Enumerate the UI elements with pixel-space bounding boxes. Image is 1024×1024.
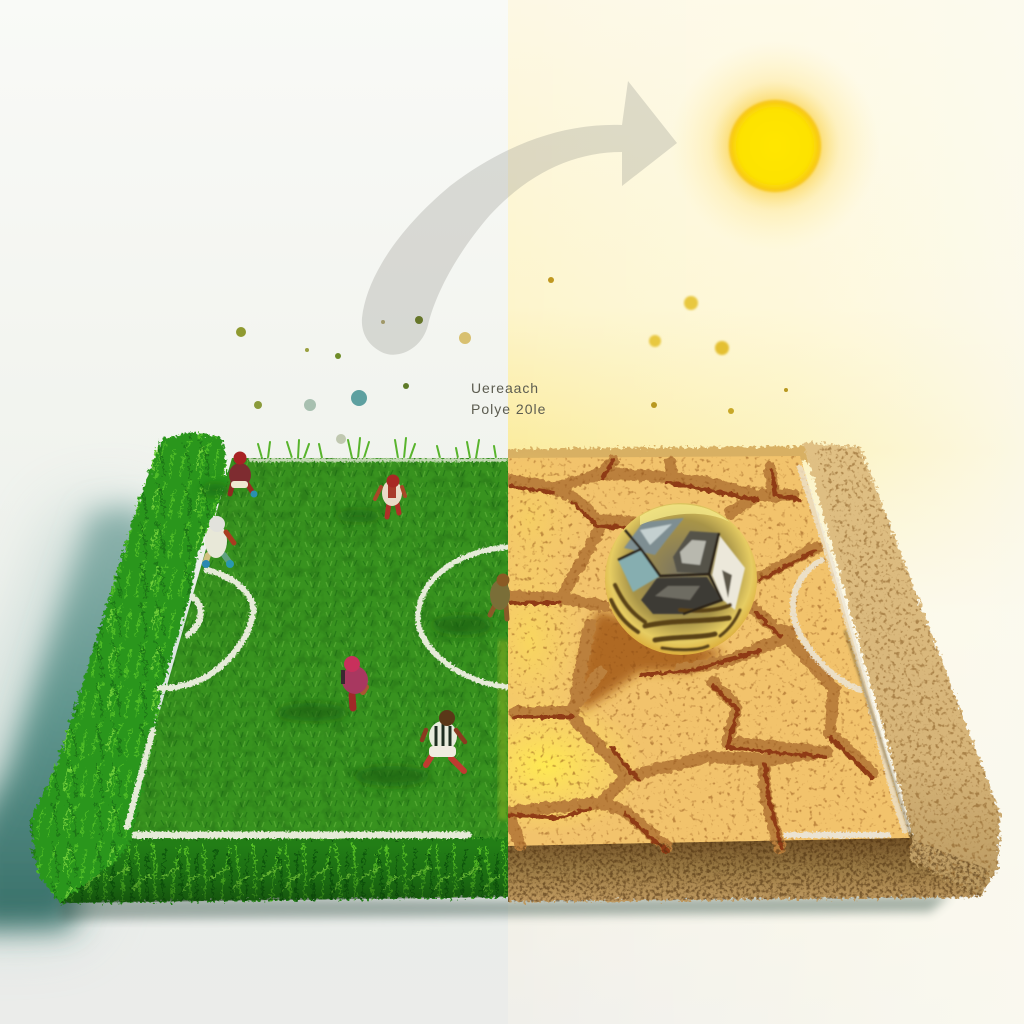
row of grass tufts behind the top line	[258, 438, 496, 458]
top blue-silver panel	[624, 518, 684, 555]
golden metallic football	[605, 503, 757, 655]
sun	[670, 41, 880, 251]
sandy border grain	[812, 442, 1000, 897]
caption text	[471, 380, 546, 417]
player 1: red kit	[229, 452, 258, 498]
background: warm right half	[508, 0, 1024, 1024]
right white-silver panel	[712, 536, 745, 610]
sandy right border	[803, 442, 1000, 897]
soil grain texture	[505, 456, 910, 846]
sunlit yellow glow across plates	[508, 502, 622, 820]
caption text: Uereaach	[471, 380, 539, 396]
left blue-silver panel	[618, 549, 660, 592]
ground shadow under the pitch	[0, 500, 950, 940]
player 5: pink kit	[342, 656, 368, 708]
ball contact shadow on soil	[580, 610, 725, 712]
grass left bank	[30, 432, 228, 903]
caption text: Polye 20le	[471, 401, 546, 417]
rough top lip of the soil	[505, 446, 812, 464]
player 6: striped kit	[422, 710, 465, 771]
player 4: dark kit at halfway line	[490, 574, 510, 619]
dark panel seams	[618, 530, 722, 614]
crack network: wide soil channels	[507, 460, 873, 848]
cracked soil surface	[505, 456, 910, 846]
crack network: dark red fissures	[507, 460, 873, 852]
dark shadows beside players	[201, 484, 492, 786]
pitch: dry cracked half	[445, 442, 1000, 902]
arrow: curved transition arrow pointing to the sun	[362, 81, 677, 355]
yellow highlight rim	[640, 504, 735, 525]
central silver panel	[673, 531, 719, 574]
floating droplets and particles	[236, 277, 788, 444]
warm glow at the grass edge	[498, 640, 508, 820]
front soil grain	[505, 838, 990, 902]
pitch markings on grass	[127, 460, 507, 835]
players	[202, 452, 510, 771]
pitch: grass half	[20, 432, 510, 903]
faded pitch markings on soil	[786, 468, 905, 835]
grass front bank	[20, 838, 510, 903]
gold stripes on lower ball	[611, 585, 740, 650]
dark groove beside the border line	[845, 630, 912, 838]
player 2: white kit	[202, 516, 234, 568]
grass playing surface	[120, 458, 510, 850]
player 3: red and white kit	[375, 474, 405, 517]
soil front side	[505, 835, 995, 902]
lower dark panel	[641, 577, 722, 614]
background: cool left half	[0, 0, 508, 1024]
